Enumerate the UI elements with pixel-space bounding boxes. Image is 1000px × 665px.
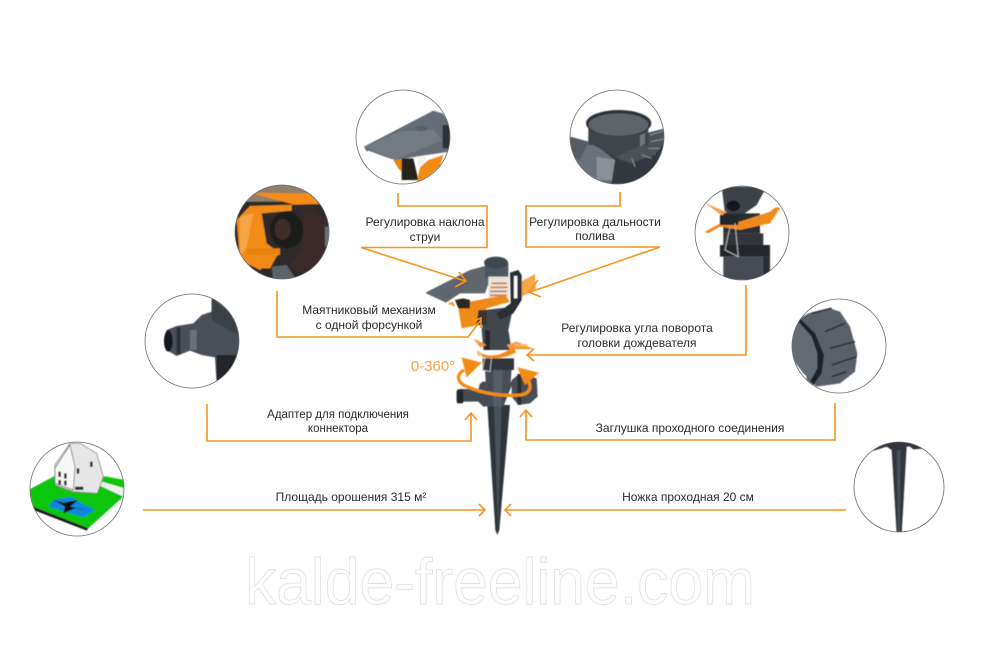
callout: irrigation area: Площадь орошения 315 м² bbox=[276, 490, 426, 504]
callout: pendulum mechanism: Маятниковый механизм bbox=[302, 303, 436, 317]
inset: pendulum mechanism bbox=[233, 183, 333, 280]
callout: spike length: Ножка проходная 20 см bbox=[622, 490, 754, 504]
inset: irrigated house bbox=[28, 442, 125, 536]
callout: rotation angle: Регулировка угла поворота bbox=[561, 321, 713, 335]
angle label: 0-360° bbox=[411, 358, 455, 375]
callout: range: Регулировка дальности bbox=[529, 215, 661, 229]
swivel ring bbox=[477, 344, 527, 372]
inset: pass-through cap bbox=[791, 299, 886, 393]
spike stake bbox=[487, 405, 510, 535]
callout: adapter: Адаптер для подключения bbox=[267, 409, 409, 421]
callout: irrigation area bbox=[143, 490, 485, 516]
inset: range adjustment bbox=[570, 90, 667, 187]
inset: rotation angle adjustment bbox=[695, 186, 789, 280]
callout: cap: Заглушка проходного соединения bbox=[596, 421, 784, 435]
callout: pendulum mechanism bbox=[277, 291, 481, 337]
callout: jet tilt: струи bbox=[410, 230, 440, 244]
callout: range bbox=[526, 192, 661, 297]
callout: spike length bbox=[505, 490, 846, 516]
callout: rotation angle: головки дождевателя bbox=[577, 336, 697, 350]
callout: jet tilt: Регулировка наклона bbox=[365, 215, 485, 229]
callout: adapter bbox=[207, 404, 477, 441]
inset: spike bbox=[854, 438, 944, 534]
inset: hose adapter bbox=[145, 294, 243, 388]
rotation arrows bbox=[458, 357, 539, 395]
watermark: kalde-freeline.com bbox=[245, 545, 755, 618]
callout: rotation angle bbox=[527, 285, 746, 361]
callout: adapter: коннектора bbox=[308, 423, 369, 435]
inset: jet tilt adjustment bbox=[356, 90, 450, 184]
callout: jet tilt bbox=[361, 193, 487, 287]
head and column bbox=[426, 257, 536, 350]
callout: cap bbox=[520, 403, 835, 440]
callout: range: полива bbox=[575, 229, 615, 243]
body and connectors bbox=[457, 358, 538, 407]
main product: impulse sprinkler bbox=[426, 257, 539, 535]
callout: pendulum mechanism: с одной форсункой bbox=[316, 318, 422, 332]
